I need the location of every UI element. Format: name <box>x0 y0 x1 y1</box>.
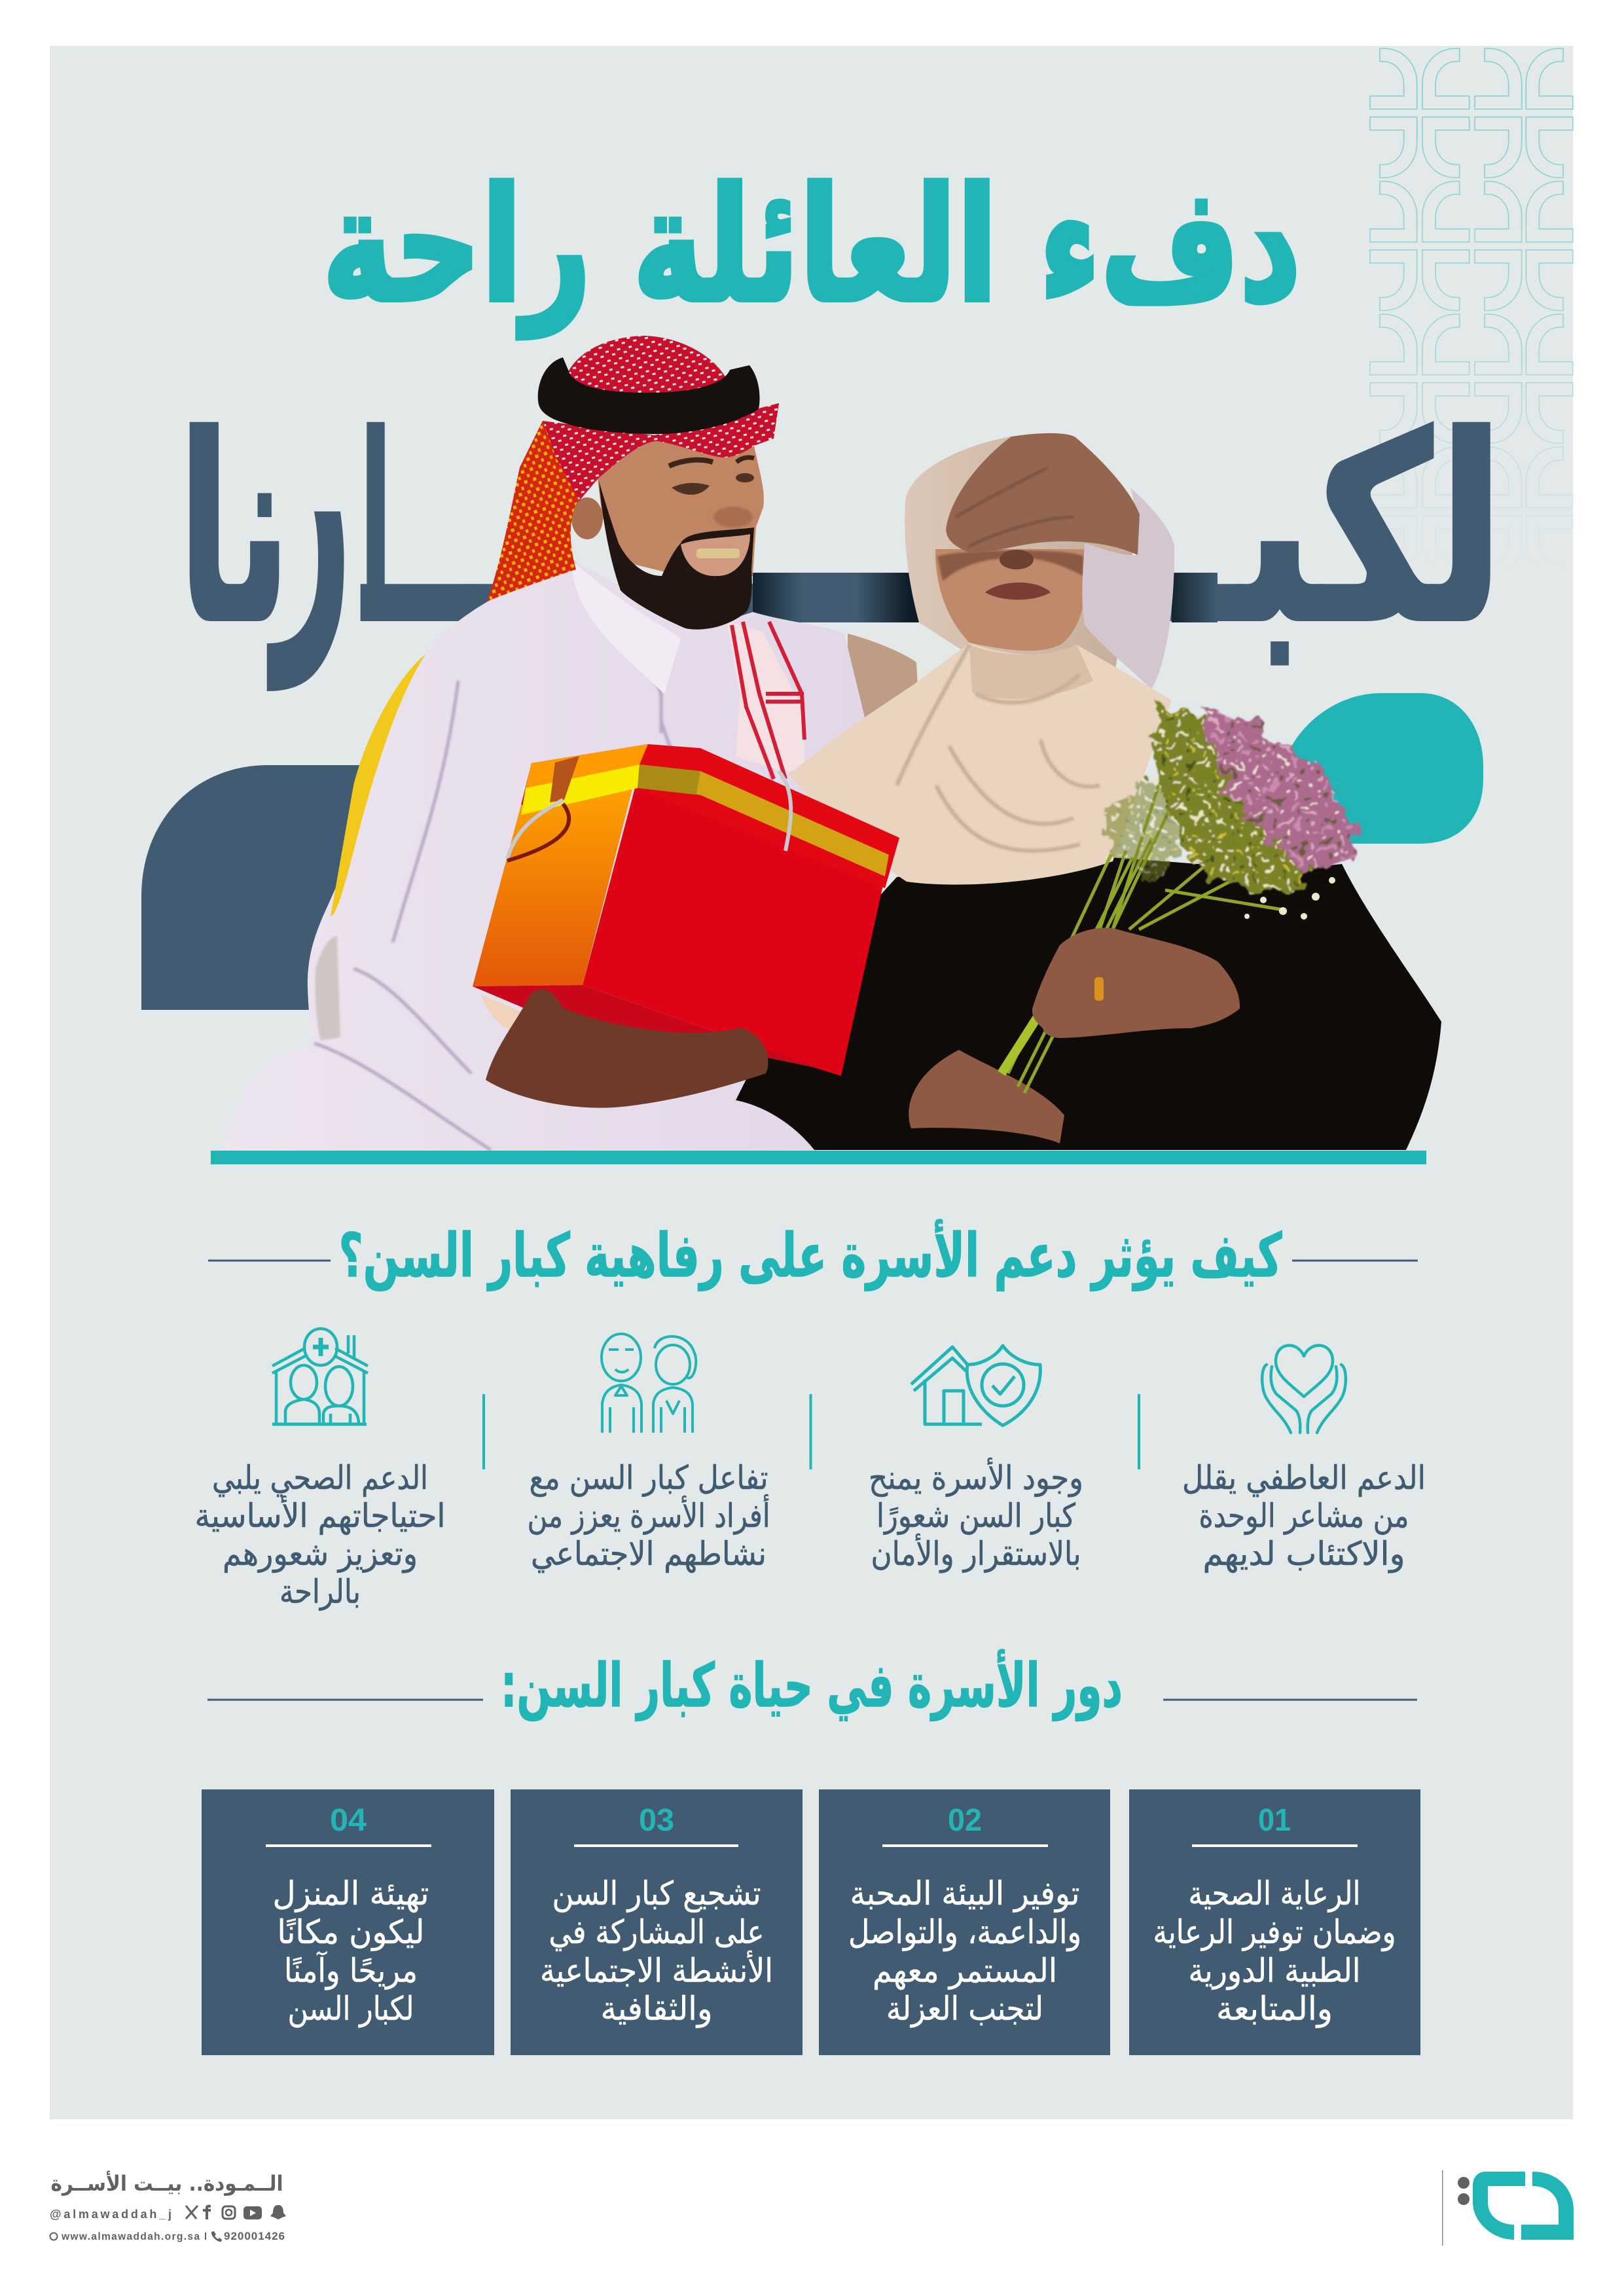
card 04: ليكون مكانًا <box>278 1913 424 1951</box>
woman: gold ring <box>1094 977 1104 1001</box>
footer: website and phone: 920001426 <box>224 2230 285 2242</box>
icon: house with shield <box>911 1346 1040 1426</box>
man: hat top <box>563 336 731 412</box>
text: column 1: الدعم العاطفي يقلل <box>1182 1459 1426 1497</box>
text: column 4: وتعزيز شعورهم <box>223 1535 418 1573</box>
man: scarf red lines <box>732 622 804 779</box>
man: ghutra drape <box>487 421 598 601</box>
woman: neck and scarf drape <box>789 643 1172 885</box>
text: column 1: والاكتئاب لديهم <box>1203 1535 1405 1573</box>
woman: scarf folds <box>897 645 1100 851</box>
gift box: underside <box>473 985 841 1076</box>
card 01 <box>1129 1789 1420 2055</box>
text: column 4: احتياجاتهم الأساسية <box>195 1496 445 1535</box>
footer: social icons <box>186 2205 286 2219</box>
card 01: 01 <box>1258 1803 1291 1838</box>
footer: social handle: @almawaddah_j <box>50 2208 171 2221</box>
man: collar <box>572 561 681 694</box>
gift box: front face <box>583 788 885 1076</box>
card 02: توفير البيئة المحبة <box>850 1874 1080 1912</box>
woman: black dress <box>694 857 1441 1150</box>
dividers between columns <box>484 1394 1139 1469</box>
man: hand holding box <box>486 990 768 1108</box>
gift box: left face <box>473 779 635 986</box>
card 01: الطبية الدورية <box>1189 1952 1360 1990</box>
title word part: lam kaf ba: لكبـ <box>1171 382 1504 679</box>
text: column 3 <box>528 1459 770 1573</box>
woman: neck shading <box>969 645 1093 699</box>
text: column 4: الدعم الصحي يلبي <box>212 1459 428 1497</box>
flowers: small white buds on sprigs <box>1244 861 1335 920</box>
flowers: bouquet stems <box>1001 785 1283 1093</box>
title word part: nun alef: نا <box>179 382 290 679</box>
section heading 2: دور الأسرة في حياة كبار السن: <box>501 1649 1123 1721</box>
man: hand over eyes <box>946 433 1140 555</box>
text: column 2: بالاستقرار والأمان <box>871 1534 1081 1573</box>
woman: face <box>935 549 1087 651</box>
shape: dark rounded block <box>141 765 406 1010</box>
flowers: sparse left sprigs <box>1106 779 1178 884</box>
text: column 1 <box>1182 1459 1426 1573</box>
man: robe yellow highlight <box>331 655 425 916</box>
card 01: وضمان توفير الرعاية <box>1153 1913 1396 1952</box>
text: column 3: أفراد الأسرة يعزز من <box>528 1494 770 1535</box>
flowers: pink blossoms <box>1204 704 1358 870</box>
title line 1: دفء العائلة راحة <box>322 154 1301 338</box>
card 03: الأنشطة الاجتماعية <box>540 1950 773 1990</box>
gift box: rope handle <box>507 771 791 861</box>
gift box: gold band <box>521 756 889 876</box>
woman: hijab head wrap <box>905 437 1139 687</box>
gift box: lid orange <box>526 744 648 788</box>
text: column 2 <box>869 1458 1083 1573</box>
footer: website and phone: www.almawaddah.org.sa <box>61 2231 200 2242</box>
woman: lower hand <box>909 1050 1064 1143</box>
card 04: مريحًا وآمنًا <box>284 1951 418 1990</box>
text: column 3: نشاطهم الاجتماعي <box>531 1535 767 1573</box>
woman: upper hand with ring <box>1032 927 1240 1038</box>
icon: hands holding heart <box>1262 1346 1346 1433</box>
text: column 2: وجود الأسرة يمنح <box>869 1458 1083 1498</box>
card 01: الرعاية الصحية <box>1189 1874 1360 1912</box>
card 04: تهيئة المنزل <box>272 1874 429 1913</box>
title word part: long connecting bar: ــــــــ <box>362 382 1210 679</box>
card 02: 02 <box>948 1803 982 1838</box>
man: ear <box>571 497 603 539</box>
man: red and white scarf strip <box>727 622 804 771</box>
man: cuff reflection <box>481 995 520 1033</box>
man: ghutra front band <box>543 403 779 501</box>
card 01: والمتابعة <box>1216 1990 1333 2028</box>
text: column 3: تفاعل كبار السن مع <box>529 1459 768 1498</box>
logo <box>1442 2170 1574 2246</box>
card 03: 03 <box>639 1803 674 1838</box>
text: column 1: من مشاعر الوحدة <box>1199 1497 1409 1535</box>
card 02: لتجنب العزلة <box>886 1990 1043 2028</box>
man: arm behind woman <box>848 634 918 759</box>
title line 2: ر <box>267 289 352 691</box>
man: cuff shading <box>315 936 340 1041</box>
card 04: لكبار السن <box>288 1990 414 2028</box>
flowers: green and white blossoms <box>1153 698 1322 892</box>
card 03: تشجيع كبار السن <box>552 1874 761 1913</box>
card 02: المستمر معهم <box>873 1952 1057 1990</box>
card 02 <box>819 1789 1110 2055</box>
footer: organisation slogan: الــمـودة.. بيــت الأســرة <box>51 2170 283 2196</box>
man: face <box>598 441 764 576</box>
man: robe folds <box>314 561 779 1150</box>
card 03: على المشاركة في <box>549 1913 765 1951</box>
card 04: 04 <box>330 1803 367 1838</box>
man: teeth <box>696 548 740 558</box>
heading rules 2 <box>208 1699 1417 1700</box>
text: column 2: كبار السن شعورًا <box>876 1497 1075 1535</box>
title bar shadow <box>753 573 1218 622</box>
gift box: lid top <box>521 744 899 888</box>
icon: house with medical sign and couple <box>272 1329 368 1424</box>
photo: man and elderly woman with gift and flowers <box>223 336 1441 1150</box>
shape: teal rounded block <box>1283 693 1483 844</box>
man: sleeve over woman <box>1082 488 1174 689</box>
heading rules 1 <box>208 1259 1418 1262</box>
man: eye and brow <box>669 457 754 528</box>
woman: mouth and nose <box>937 550 1083 600</box>
card 03 <box>511 1789 803 2055</box>
man: smile <box>681 534 750 576</box>
card 04 <box>202 1789 494 2055</box>
footer: website and phone <box>50 2230 285 2242</box>
decorative pattern: top right <box>1370 48 1573 576</box>
title line 2: ا <box>360 382 391 679</box>
text: column 4: بالراحة <box>280 1573 361 1611</box>
text: column 4 <box>195 1459 445 1611</box>
man: black agal <box>538 357 760 434</box>
card 03: والثقافية <box>601 1990 712 2028</box>
title line 2 <box>179 289 1504 691</box>
card 02: والداعمة، والتواصل <box>848 1913 1081 1952</box>
teal bar under photo <box>211 1151 1426 1164</box>
man: beard <box>599 481 754 630</box>
icon: elderly couple <box>602 1334 696 1433</box>
man: robe <box>223 561 865 1150</box>
